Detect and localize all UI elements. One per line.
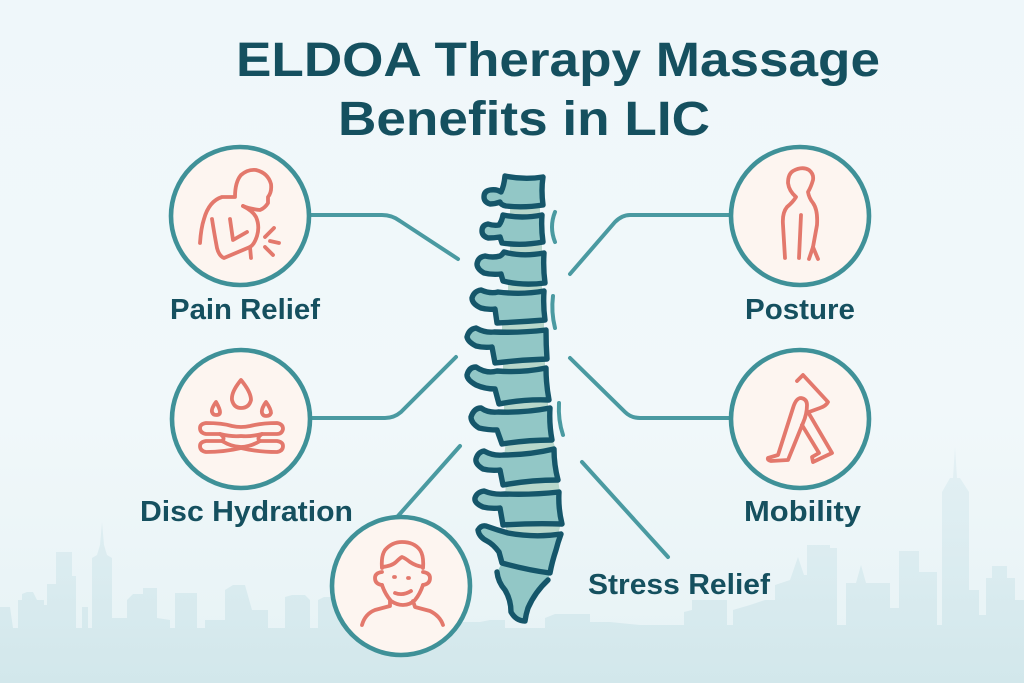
vertebra 6 (467, 367, 549, 404)
icon: walking legs (731, 350, 869, 488)
label: Posture (745, 294, 855, 326)
vertebra 5 (467, 328, 547, 363)
vertebra 9 (475, 491, 562, 525)
label: Disc Hydration (140, 496, 353, 528)
vertebra 1 (484, 176, 543, 207)
label: Pain Relief (170, 294, 320, 326)
vertebra 7 (471, 408, 552, 444)
vertebra 3 (477, 252, 545, 284)
icon: smiling face (332, 517, 470, 655)
vertebra 4 (472, 290, 545, 323)
label: Stress Relief (588, 569, 770, 601)
lower vertebra (478, 526, 561, 573)
title: ELDOA Therapy Massage (236, 34, 880, 87)
title: Benefits in LIC (338, 93, 710, 146)
title (236, 34, 880, 146)
icon: disc hydration (172, 350, 310, 488)
vertebra 2 (482, 215, 543, 244)
panel: stress relief (332, 517, 770, 655)
spinal discs (502, 204, 561, 535)
label: Mobility (744, 496, 861, 528)
connector lines (311, 215, 731, 557)
icon: posture figure (731, 147, 869, 285)
sacrum (497, 563, 550, 621)
nerve arcs (552, 212, 563, 435)
city skyline (0, 447, 1024, 683)
vertebra 8 (476, 449, 558, 485)
panel: disc hydration (140, 350, 353, 528)
panel: pain relief (170, 147, 320, 326)
panel: posture (731, 147, 869, 326)
panel: mobility (731, 350, 869, 528)
spine (467, 176, 563, 621)
icon: pain relief (171, 147, 309, 285)
